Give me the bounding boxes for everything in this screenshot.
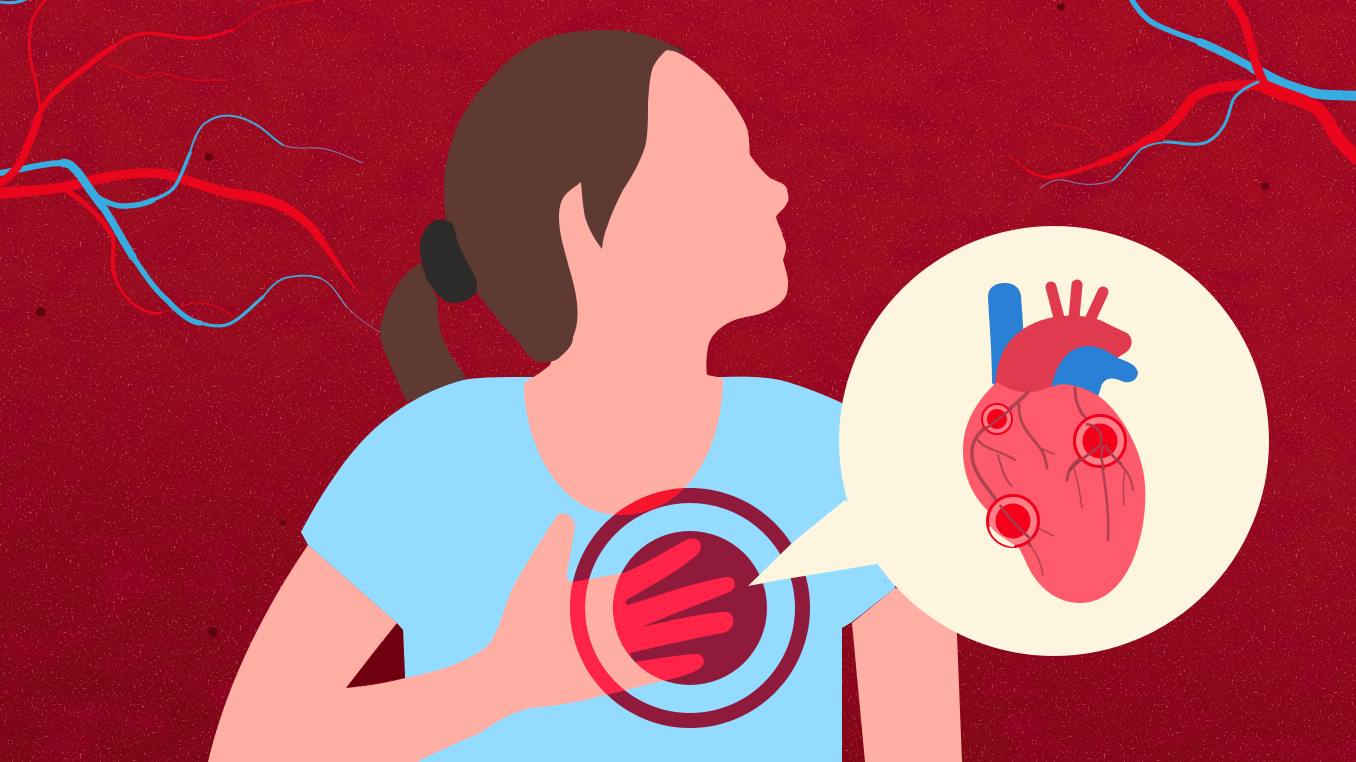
pain point: lower left [988, 496, 1038, 546]
superior vena cava [988, 283, 1024, 390]
gap between arm and torso [346, 624, 405, 688]
left arm and hand [208, 513, 735, 762]
head, neck and chest skin [524, 49, 788, 515]
hair tie [420, 220, 477, 303]
ponytail [380, 263, 467, 402]
hair [444, 30, 687, 362]
blood vessels: left [0, 0, 380, 332]
speech bubble with tail [748, 226, 1269, 656]
coronary vessels [972, 388, 1133, 575]
t-shirt [301, 377, 900, 762]
aortic branches [1051, 285, 1103, 320]
blood vessels: right [1008, 0, 1356, 188]
heart body [963, 382, 1145, 603]
chest pain target rings [578, 496, 802, 720]
pain point: upper left [982, 404, 1012, 434]
anatomical heart [963, 283, 1145, 603]
aorta [995, 316, 1132, 400]
pain point: right [1070, 416, 1126, 470]
pulmonary artery [1050, 346, 1138, 400]
right arm [852, 588, 962, 762]
